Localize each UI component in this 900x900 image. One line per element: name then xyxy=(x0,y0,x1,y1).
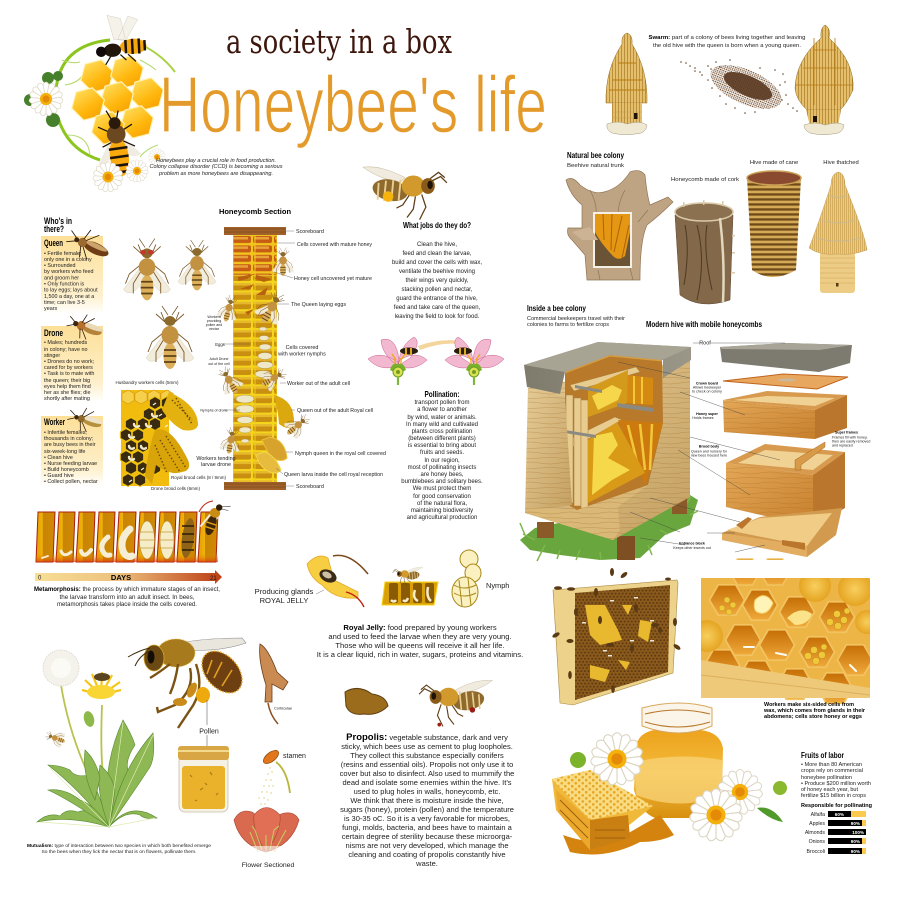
text: propolis: waste. xyxy=(415,859,438,868)
intro text xyxy=(150,158,283,177)
heading: inside a bee colony: colonies to farms to fertilize crops xyxy=(527,322,609,328)
label: cork, cane and thatch: Honeycomb made of cork xyxy=(671,177,739,183)
labels: small column notes: Nymphs of drone xyxy=(200,408,228,412)
bar chart: pollinating crops: 90% xyxy=(851,849,860,854)
labels: honeycomb section callouts: Workers tending xyxy=(196,456,236,462)
labels: honeycomb section callouts: Honey cell uncovered yet mature xyxy=(294,276,372,282)
illustration: bee head glands xyxy=(307,555,368,607)
days arrow: 21 xyxy=(210,576,217,582)
panel: queen xyxy=(41,236,103,314)
text: royal jelly xyxy=(317,623,523,659)
illustration: pollination between flowers xyxy=(368,337,504,385)
panel: drone: stinger xyxy=(44,353,60,359)
labels: honeycomb section callouts: with worker nymphs xyxy=(277,352,326,358)
diagram: honeycomb section column xyxy=(213,227,314,490)
icon: worker bee xyxy=(65,403,106,437)
logo: honeycomb emblem with bees and daisies xyxy=(24,13,175,192)
text: what jobs do they do: What jobs do they do? xyxy=(403,221,471,230)
label: producing glands: Producing glands xyxy=(255,587,314,596)
bar chart: pollinating crops xyxy=(805,811,866,855)
text: what jobs do they do xyxy=(392,221,482,320)
label: pollen xyxy=(199,700,219,790)
heading: who's in there xyxy=(44,216,72,235)
illustration: daisies and buds xyxy=(570,733,787,842)
panel: queen: by workers who feed xyxy=(44,269,93,275)
illustration: propolis lump xyxy=(345,688,388,714)
panel: worker xyxy=(41,416,103,486)
text: what jobs do they do: build and cover the cells with wax, xyxy=(392,260,482,266)
text: what jobs do they do: feed and clean the larvae, xyxy=(402,251,472,257)
labels: small column notes: out of the cell xyxy=(208,362,230,366)
bar chart: pollinating crops: Alfalfa xyxy=(811,812,825,818)
text: propolis: certain degree of sterility because these microorga- xyxy=(342,832,513,841)
labels: modern hive parts: Holds frames xyxy=(692,416,714,420)
bar chart: pollinating crops: Broccoli xyxy=(807,849,825,855)
illustration: exploded modern hive xyxy=(618,343,852,557)
panel: worker: are busy bees in their xyxy=(44,442,96,448)
text: pollination: a flower to another xyxy=(417,407,467,413)
illustration: honeycomb frame with bees xyxy=(552,568,681,705)
panel: worker: six-week-long life xyxy=(44,449,85,455)
illustration: large bee with pollen xyxy=(128,638,250,728)
panel: drone: cared for by workers xyxy=(44,365,93,371)
labels: comb sizes: Husbandry workers cells (5mm) xyxy=(116,380,179,385)
illustration: dandelion plant xyxy=(37,650,157,827)
illustration: stamen with pollen xyxy=(258,748,306,805)
illustration: natural tree trunk hive xyxy=(566,171,673,280)
text: what jobs do they do: Clean the hive, xyxy=(417,242,457,248)
text: propolis: cleaning and coating of propolis constantly hive xyxy=(348,850,506,859)
text: pollination: by wind, water or animals. xyxy=(407,415,477,421)
labels: honeycomb section callouts: Scoreboard xyxy=(296,229,324,235)
panel: drone: eyes help them find xyxy=(44,384,91,390)
illustration: cork hive xyxy=(675,200,735,304)
label: nymph: Nymph xyxy=(486,581,509,590)
text: what jobs do they do: guard the entrance of the hive, xyxy=(396,296,478,302)
panel: drone: Drone xyxy=(44,328,63,339)
days arrow: 0 xyxy=(38,576,42,582)
illustration: bee feeding larvae cells xyxy=(382,567,438,605)
text: fruits of labor: • Produce $200 million worth xyxy=(801,781,871,787)
text: pollination: bumblebees and solitary bees. xyxy=(401,479,483,485)
heading: inside a bee colony: Commercial beekeepers travel with their xyxy=(527,316,625,322)
text: pollination: (between different plants) xyxy=(408,436,476,442)
labels: honeycomb section callouts: The Queen laying eggs xyxy=(291,302,346,308)
text: propolis: used to plug holes in walls, honeycomb, etc. xyxy=(354,787,500,796)
labels: comb sizes: Royal brood cells (8 / 9mm) xyxy=(171,475,227,480)
labels: comb sizes xyxy=(116,380,227,491)
panel: queen: years xyxy=(44,306,57,312)
labels: small column notes: pollen and xyxy=(206,323,222,327)
text: propolis: (resins and essential oils). Propolis not only use it to xyxy=(341,760,513,769)
panel: queen: • Fertile female; xyxy=(44,251,82,257)
bar chart: pollinating crops: Almonds xyxy=(805,830,825,836)
text: royal jelly: Those who will be queens will receive it all her life. xyxy=(335,641,505,650)
text: propolis: cover but also to disinfect. Also used to mummify the xyxy=(340,769,514,778)
illustration: honeycomb piece xyxy=(552,770,674,854)
labels: modern hive parts: to check on colony xyxy=(692,390,722,394)
illustration: cutaway bee hive xyxy=(520,342,698,561)
panel: drone: • Task is to mate with xyxy=(44,371,94,377)
text: propolis: We think that there is moisture inside the hive, xyxy=(350,796,504,805)
text: propolis: fungi, molds, bacteria, and bees have to maintain a xyxy=(342,823,513,832)
text: pollination: plants cross pollination xyxy=(412,429,472,435)
panel: drone: in colony; have no xyxy=(44,347,87,353)
labels: honeycomb section callouts: Cells covered xyxy=(286,345,318,351)
panel: queen: time; can live 3-5 xyxy=(44,300,85,306)
text: pollination: for good conservation xyxy=(413,494,471,500)
title xyxy=(159,22,547,149)
text: fruits of labor: honeybee pollination xyxy=(801,775,852,781)
panel: worker: • Collect pollen, nectar xyxy=(44,479,98,485)
illustration: old straw skep right xyxy=(795,25,853,135)
panel: queen: only one in a colony xyxy=(44,257,92,263)
text: mutualism: Mutualism: type of interaction between two species in which both benefited emerge xyxy=(27,843,211,849)
illustration: flower sectioned xyxy=(234,808,299,854)
illustration: three bee castes xyxy=(123,239,216,369)
illustration: bee swarm cloud xyxy=(680,56,798,118)
icon: drone bee xyxy=(64,309,107,345)
label: cork, cane and thatch xyxy=(671,160,859,183)
intro text: problem as more honeybees are disappearing. xyxy=(158,171,273,177)
panel: drone xyxy=(41,326,103,402)
text: royal jelly: Royal Jelly: food prepared by young workers xyxy=(343,623,497,632)
labels: modern hive parts: Honey super xyxy=(696,412,718,416)
labels: modern hive parts: Frames fill with honey, xyxy=(832,436,867,440)
panel: queen: • Surrounded xyxy=(44,263,76,269)
panel: drone: shortly after mating xyxy=(44,396,90,402)
labels: modern hive parts: Roof xyxy=(699,340,711,346)
text: fruits of labor xyxy=(801,751,872,809)
illustration: bee on propolis xyxy=(419,680,493,726)
heading: who's in there: there? xyxy=(44,224,64,235)
illustration: corbicula leg xyxy=(260,644,292,724)
bar chart: pollinating crops: Onions xyxy=(809,839,825,845)
days arrow: DAYS xyxy=(111,573,131,582)
label: pollen: Pollen xyxy=(199,728,219,736)
text: pollination: most of pollinating insects xyxy=(408,465,476,471)
panel: queen: • Only function is xyxy=(44,282,85,288)
heading: modern hive: Modern hive with mobile honeycombs xyxy=(646,320,762,329)
text: pollination: In many wild and cultivated xyxy=(406,422,478,428)
labels: modern hive parts: Keeps other insects out xyxy=(673,546,711,550)
labels: modern hive parts: new bees housed here xyxy=(691,454,727,458)
labels: honeycomb section callouts: Nymph queen in the royal cell covered xyxy=(295,451,386,457)
labels: modern hive parts: Crown board xyxy=(696,382,718,386)
labels: modern hive parts: and replaced xyxy=(832,444,853,448)
illustration: cell close-up xyxy=(690,559,900,705)
text: pollination: maintaining biodiversity xyxy=(411,508,473,514)
bar chart: pollinating crops: Apples xyxy=(809,821,825,827)
text: workers make six-sided cells: Workers make six-sided cells from xyxy=(764,702,854,708)
panel: worker: • Infertile females; xyxy=(44,430,87,436)
label: cork, cane and thatch: Hive made of cane xyxy=(750,160,798,166)
labels: small column notes xyxy=(200,315,230,412)
illustration: honey jar xyxy=(634,703,723,818)
illustration: pollen jar xyxy=(178,746,229,812)
illustration: nymph xyxy=(452,550,481,607)
panel: drone: • Drones do no work; xyxy=(44,359,95,365)
labels: honeycomb section callouts: Worker out of the adult cell xyxy=(287,381,350,387)
labels: honeycomb section callouts: Queen out of the adult Royal cell xyxy=(297,408,373,414)
text: propolis xyxy=(340,732,514,868)
intro text: Colony collapse disorder (CCD) is becoming a serious xyxy=(150,164,283,170)
text: what jobs do they do: feed and take care of the queen, xyxy=(394,305,481,311)
panel: drone: the queen; their big xyxy=(44,378,90,384)
text: propolis: They collect this substance especially conifers xyxy=(350,751,504,760)
label: cork, cane and thatch: Hive thatched xyxy=(823,160,859,166)
labels: modern hive parts: Queen and nursery for xyxy=(691,450,728,454)
heading: inside a bee colony xyxy=(527,304,625,328)
days arrow xyxy=(35,570,222,584)
text: fruits of labor: • More than 80 American xyxy=(801,762,862,768)
text: workers make six-sided cells: wax, which comes from glands in their xyxy=(763,708,866,714)
labels: honeycomb section callouts: Queen larva inside the cell royal reception xyxy=(284,472,383,478)
text: propolis: sugars (honey), protein (pollen) and the temperature xyxy=(340,805,514,814)
text: fruits of labor: crops rely on commercial xyxy=(801,768,863,774)
panel: queen: and groom her xyxy=(44,276,79,282)
panel: queen: Queen xyxy=(44,238,63,249)
text: fruits of labor: Fruits of labor xyxy=(801,751,844,760)
text: pollination: of the natural flora, xyxy=(417,501,467,507)
text: what jobs do they do: their wings very quickly, xyxy=(406,278,469,284)
text: pollination: We must protect them xyxy=(413,486,471,492)
text: propolis: is 30-35 oC. So it is a very favorable for microbes, xyxy=(344,814,510,823)
panel: worker: • Guard hive xyxy=(44,473,74,479)
text: royal jelly: It is a clear liquid, rich in water, sugars, proteins and vitamins. xyxy=(317,650,523,659)
labels: modern hive parts: Brood body xyxy=(699,444,719,448)
text: pollination: fruits and seeds. xyxy=(420,450,464,456)
label: producing glands: ROYAL JELLY xyxy=(260,596,308,605)
text: pollination: is essential to bring about xyxy=(408,443,476,449)
icon: queen bee xyxy=(63,223,115,268)
bar chart: pollinating crops: 90% xyxy=(851,839,860,844)
title: a society in a box xyxy=(226,22,452,61)
illustration: corbicula leg: Corbiculae xyxy=(274,706,292,710)
text: pollination: transport pollen from xyxy=(414,400,470,406)
panel: worker: Worker xyxy=(44,417,65,428)
labels: modern hive parts: Allows beekeeper xyxy=(693,386,722,390)
text: metamorphosis: the larvae transform into an adult insect. In bees, xyxy=(60,595,195,601)
text: propolis: nisms are not very developed, which manage the xyxy=(345,841,509,850)
illustration: thatched hive xyxy=(809,172,867,293)
text: propolis: Propolis: vegetable substance, dark and very xyxy=(346,732,508,743)
text: swarm: Swarm: part of a colony of bees living together and leaving xyxy=(648,35,806,41)
heading: honeycomb section: Honeycomb Section xyxy=(219,207,291,216)
title: Honeybee's life xyxy=(159,60,547,149)
text: pollination: and agricultural production xyxy=(407,515,477,521)
text: fruits of labor: fertilize $15 billion in crops xyxy=(801,793,866,799)
illustration: cane hive xyxy=(747,171,801,277)
text: royal jelly: and used to feed the larvae when they are very young. xyxy=(328,632,512,641)
panel: drone: her as she flies; die xyxy=(44,390,90,396)
heading: natural bee colony: Beehive natural trunk xyxy=(567,163,624,169)
text: propolis: sticky, which bees use as cement to plug loopholes. xyxy=(341,742,513,751)
bar chart: pollinating crops: 100% xyxy=(852,830,864,835)
labels: small column notes: Workers xyxy=(207,315,221,319)
illustration: stamen with pollen: stamen xyxy=(283,753,306,760)
panel: worker: • Build honeycomb xyxy=(44,467,89,473)
panel: worker: • Clean hive xyxy=(44,455,73,461)
labels: honeycomb section callouts xyxy=(196,229,386,490)
panel: queen: to lay eggs; lays about xyxy=(44,288,98,294)
text: pollination: In our region, xyxy=(424,458,460,464)
illustration: worker bee with pollen xyxy=(363,167,447,220)
text: what jobs do they do: ventilate the beehive moving xyxy=(399,269,475,275)
text: swarm: the old hive with the queen is born when a young queen. xyxy=(653,43,801,49)
text: metamorphosis: Metamorphosis: the process by which immature stages of an insect, xyxy=(34,587,220,593)
text: metamorphosis: metamorphosis takes place inside the cells covered. xyxy=(57,602,197,608)
label: producing glands xyxy=(255,587,314,605)
labels: modern hive parts xyxy=(673,340,870,550)
text: propolis: dead and isolate some enemies within the hive. It's xyxy=(342,778,512,787)
bar chart: pollinating crops: 60% xyxy=(835,812,844,817)
labels: small column notes: Adult Drone xyxy=(210,357,228,361)
text: pollination xyxy=(401,389,483,521)
panel: worker: • Nurse feeding larvae xyxy=(44,461,97,467)
text: fruits of labor: of honey each year, but xyxy=(801,787,859,793)
heading: inside a bee colony: Inside a bee colony xyxy=(527,304,586,313)
labels: honeycomb section callouts: Eggs xyxy=(215,342,225,347)
labels: comb sizes: Drone brood cells (6mm) xyxy=(151,486,201,491)
text: mutualism xyxy=(27,843,211,855)
text: what jobs do they do: stacking pollen and nectar, xyxy=(401,287,473,293)
labels: modern hive parts: Super frames xyxy=(835,430,858,434)
text: pollination: Pollination: xyxy=(424,389,460,399)
panel: drone: • Males; hundreds xyxy=(44,340,88,346)
labels: modern hive parts: then are easily removed xyxy=(832,440,870,444)
intro text: Honeybees play a crucial role in food production. xyxy=(156,158,276,164)
heading: natural bee colony xyxy=(567,151,625,169)
text: metamorphosis xyxy=(34,587,220,608)
labels: honeycomb section callouts: Scoreboard xyxy=(296,484,324,490)
labels: modern hive parts: Entrance block xyxy=(679,542,705,546)
panel: worker: thousands in colony; xyxy=(44,436,94,442)
text: workers make six-sided cells: abdomens; cells store honey or eggs xyxy=(764,714,862,720)
text: what jobs do they do: leaving the field to look for food. xyxy=(395,314,480,320)
text: swarm xyxy=(648,35,806,49)
labels: honeycomb section callouts: Cells covered with mature honey xyxy=(297,242,372,248)
icon: small flying bee xyxy=(43,727,68,749)
heading: who's in there: Who's in xyxy=(44,216,72,227)
bar chart: pollinating crops: 90% xyxy=(851,821,860,826)
text: mutualism: So the bees when they lick the nectar that is on flowers, pollinate them. xyxy=(42,849,196,855)
labels: small column notes: providing xyxy=(207,319,221,323)
illustration: comb with brood cells xyxy=(120,390,198,486)
text: pollination: are honey bees, xyxy=(420,472,464,478)
panel: queen: 1,500 a day, one at a xyxy=(44,294,94,300)
heading: natural bee colony: Natural bee colony xyxy=(567,151,625,160)
labels: small column notes: nectar xyxy=(209,327,220,331)
diagram: metamorphosis strip xyxy=(36,499,231,562)
text: fruits of labor: Responsible for pollinating xyxy=(801,803,872,809)
illustration: old straw skep left xyxy=(606,33,647,135)
text: workers make six-sided cells xyxy=(763,702,866,720)
label: flower sectioned: Flower Sectioned xyxy=(242,862,294,869)
labels: honeycomb section callouts: larvae drone xyxy=(201,462,231,468)
